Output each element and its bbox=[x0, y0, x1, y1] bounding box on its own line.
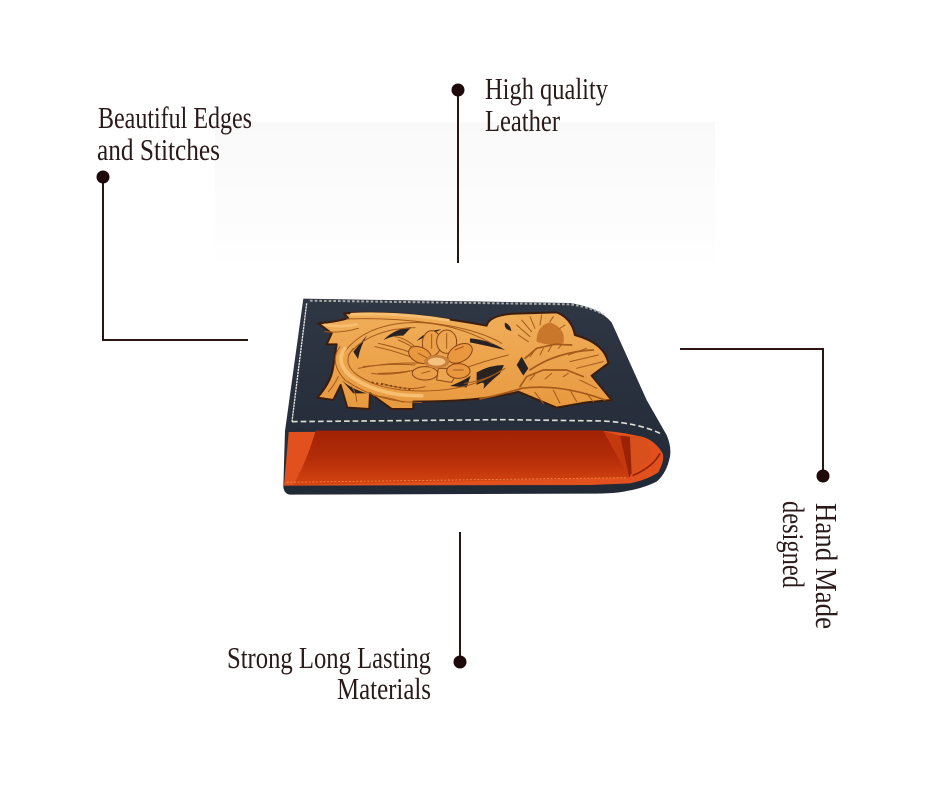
left frond highlight bbox=[325, 324, 357, 326]
main arc and tails bbox=[341, 348, 422, 396]
callout: strong long lasting materials: Strong Long Lasting bbox=[227, 640, 431, 675]
top frond highlight bbox=[352, 314, 448, 320]
wallet photo bbox=[283, 299, 670, 495]
right leaves bbox=[480, 315, 605, 403]
flower bbox=[406, 330, 476, 382]
callout: beautiful edges and stitches: and Stitches bbox=[97, 132, 220, 167]
carving gaps bbox=[342, 323, 528, 393]
wallet silhouette bbox=[283, 299, 670, 495]
stitching bbox=[292, 301, 661, 434]
upper fan bbox=[537, 322, 564, 345]
background haze bbox=[215, 122, 715, 262]
floral carving bbox=[317, 312, 612, 409]
lower leaf bbox=[480, 370, 605, 400]
middle leaf bbox=[525, 344, 593, 370]
callout: hand made designed: Hand Made bbox=[809, 503, 844, 629]
callout: beautiful edges and stitches bbox=[96, 100, 252, 340]
callout: high quality leather bbox=[452, 71, 608, 263]
callout: high quality leather: High quality bbox=[485, 71, 608, 106]
callout: high quality leather: Leather bbox=[485, 103, 561, 138]
upper arc bbox=[343, 322, 492, 355]
callout: hand made designed: designed bbox=[776, 501, 811, 588]
carving silhouette bbox=[317, 312, 612, 409]
fronds bbox=[358, 337, 508, 389]
callout: beautiful edges and stitches: Beautiful Edges bbox=[98, 100, 252, 135]
callout: hand made designed bbox=[680, 349, 844, 629]
callout: strong long lasting materials: Materials bbox=[337, 671, 431, 706]
wallet interior bbox=[284, 430, 663, 486]
callout: strong long lasting materials bbox=[227, 532, 466, 706]
left scroll bbox=[325, 314, 508, 402]
